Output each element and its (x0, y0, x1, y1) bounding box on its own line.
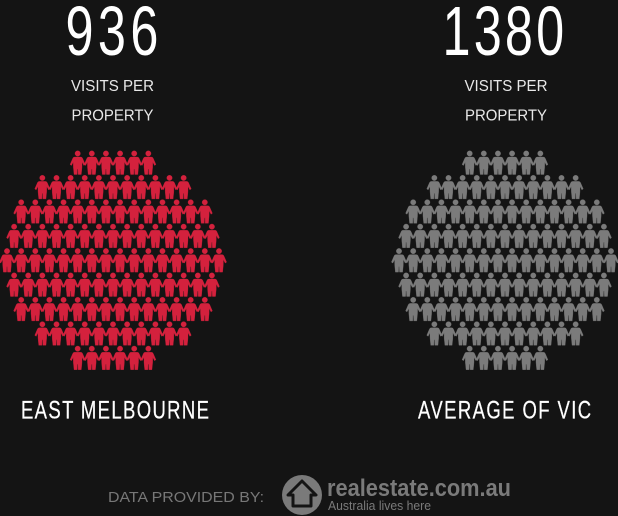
text: visits per property: PROPERTY (465, 108, 547, 124)
text: visits per property: VISITS PER (71, 78, 154, 95)
panel: Average of VIC (391, 0, 618, 424)
icon: realestate house logo (282, 475, 322, 515)
panel: East Melbourne (0, 0, 227, 424)
tagline: Australia lives here (328, 499, 431, 513)
wordmark: realestate.com.au: realestate.com.au (327, 475, 511, 502)
icon array: grey people (391, 151, 618, 370)
text: visits per property (464, 78, 548, 124)
text: visits per property: VISITS PER (464, 78, 548, 95)
text: visits per property (71, 78, 154, 124)
label: East Melbourne: EAST MELBOURNE (21, 396, 209, 424)
icon array: red people (0, 151, 227, 370)
footer: data credit (108, 475, 511, 515)
text: visits per property: PROPERTY (72, 108, 154, 124)
label: Average of VIC: AVERAGE OF VIC (418, 396, 591, 424)
text: data provided by: DATA PROVIDED BY: (108, 489, 264, 506)
